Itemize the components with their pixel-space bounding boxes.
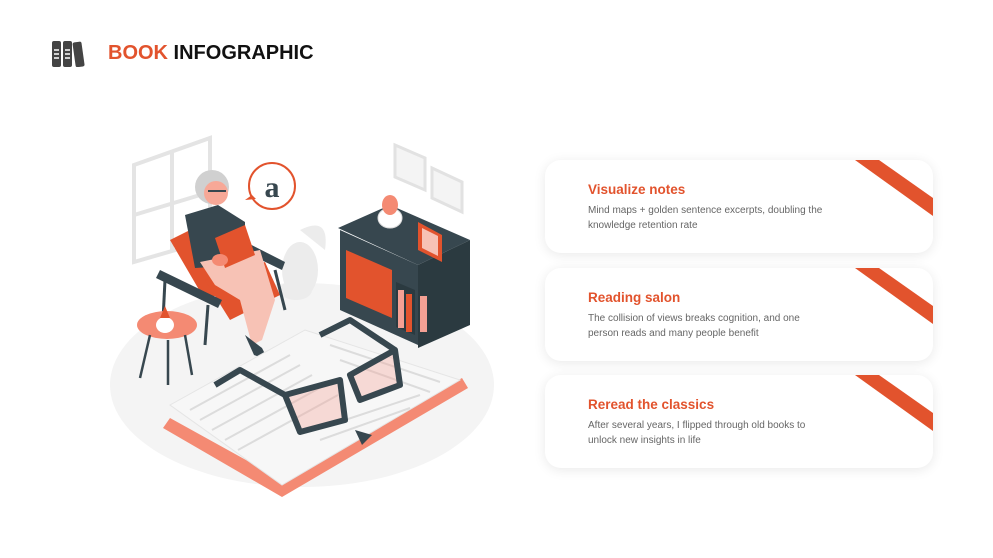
window [134,138,210,262]
plant behind [280,226,326,300]
glasses [215,320,400,432]
side table [137,306,197,385]
card: visualize notes: Mind maps + golden sentence excerpts, doubling the knowledge retention rate [588,205,822,231]
card: visualize notes: Visualize notes [588,182,685,197]
speech bubble [245,163,295,209]
card: reading salon: The collision of views breaks cognition, and one person reads and many people benefit [588,313,800,339]
cabinet [338,195,470,348]
card: reread the classics: Reread the classics [588,397,714,412]
card: reread the classics [545,375,933,468]
chair and person [156,170,285,360]
card: visualize notes [545,160,933,253]
logo icon: books [52,41,84,67]
open book [163,330,468,497]
illustration: reader with book and glasses [110,135,494,497]
picture frames [395,145,462,212]
floor [110,283,494,487]
card: reading salon: Reading salon [588,290,680,305]
title: BOOK INFOGRAPHIC [108,42,314,64]
card: reading salon [545,268,933,361]
speech bubble: a [264,171,280,204]
card: reread the classics: After several years, I flipped through old books to unlock new insights in life [588,420,805,446]
